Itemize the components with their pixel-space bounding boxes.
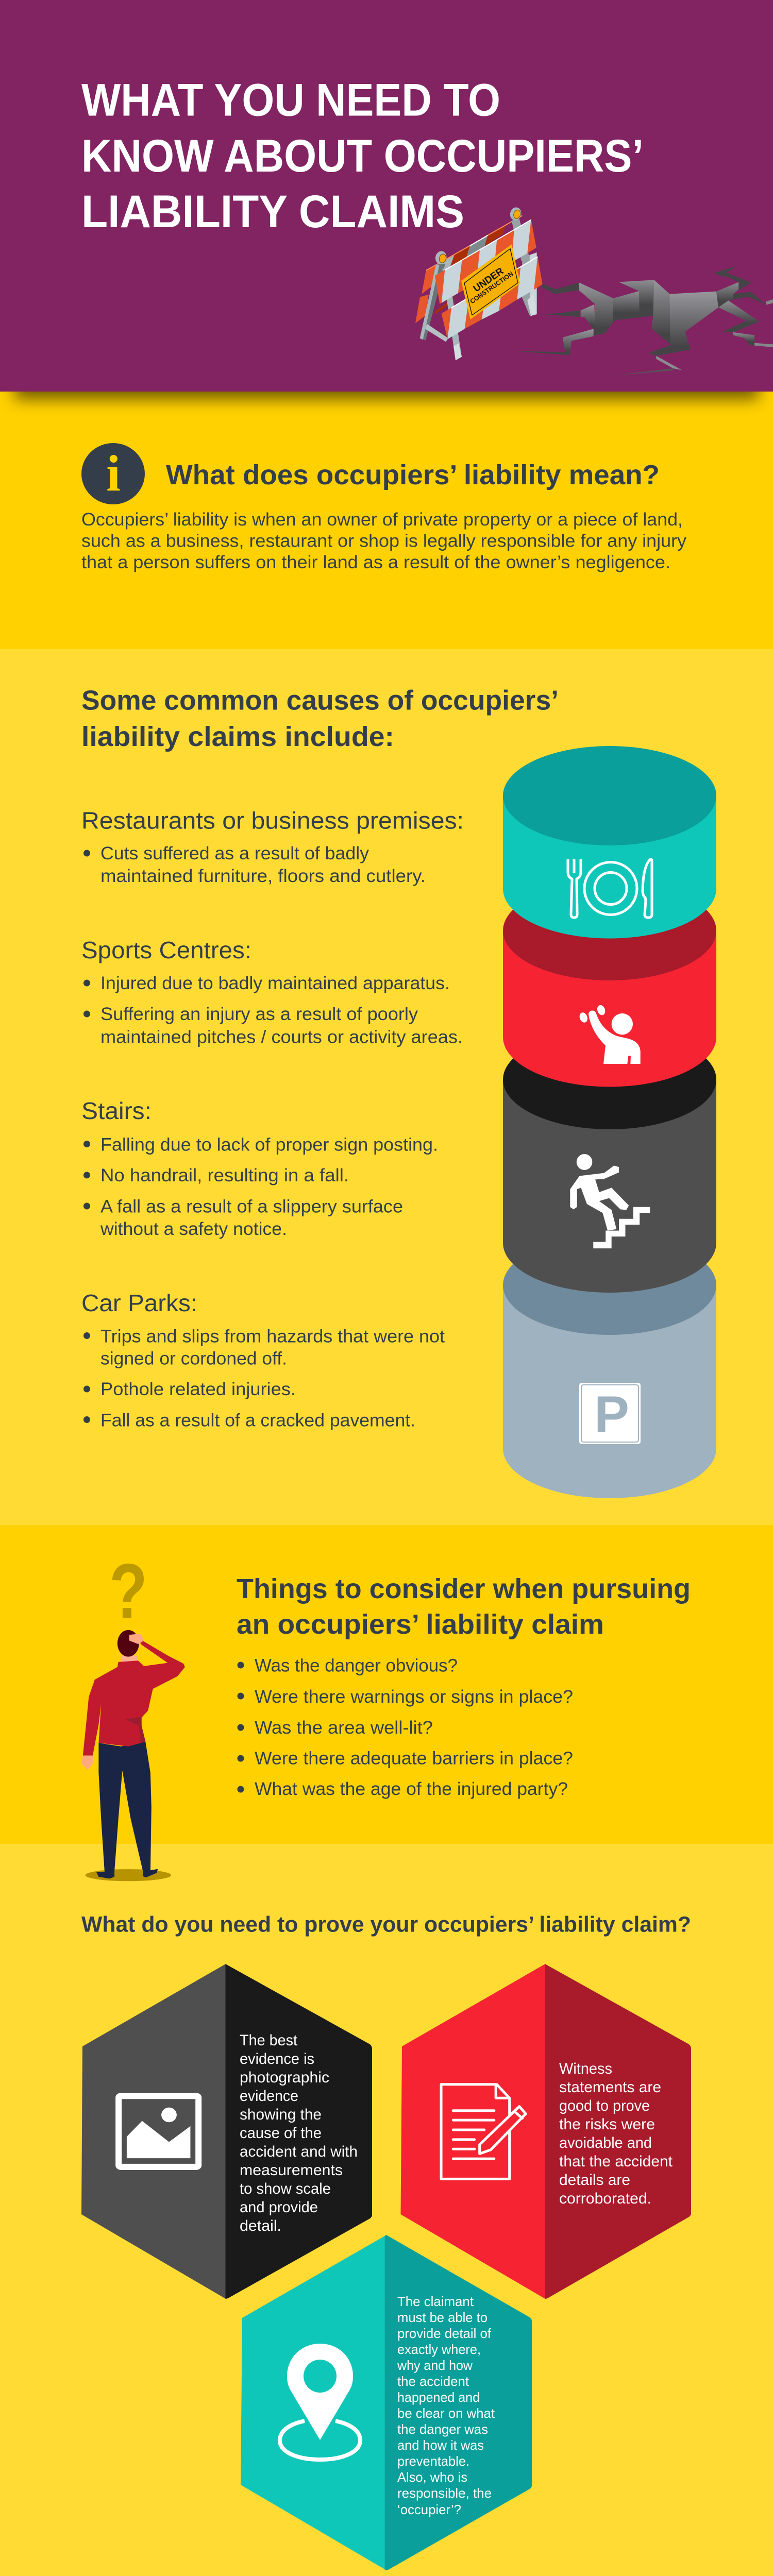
panel: what do you need to prove <box>0 1844 773 2576</box>
text: witness statements: avoidable and <box>559 2134 652 2151</box>
icon: question mark: ? <box>109 1548 147 1635</box>
text block: car parks: Pothole related injuries. <box>100 1379 296 1399</box>
text: location detail: the danger was <box>397 2421 488 2437</box>
text: location detail: happened and <box>397 2389 480 2405</box>
text: location detail: The claimant <box>397 2294 474 2309</box>
icon: document and pen <box>441 2084 526 2179</box>
text: photographic evidence: and provide <box>240 2199 318 2216</box>
text block: car parks: Car Parks: <box>81 1290 197 1316</box>
hexagon: witness statements <box>401 1964 691 2299</box>
text block: car parks: signed or cordoned off. <box>100 1349 287 1369</box>
text: witness statements: the risks were <box>559 2116 655 2133</box>
icon: person falling on stairs <box>570 1154 650 1248</box>
list: questions to consider: What was the age of the injured party? <box>255 1779 568 1799</box>
illustration: under construction barrier <box>415 206 543 360</box>
text block: stairs <box>81 1097 438 1239</box>
text block: stairs: A fall as a result of a slippery surface <box>100 1197 403 1217</box>
text block: stairs: No handrail, resulting in a fall. <box>100 1165 349 1185</box>
text block: sports centres: Suffering an injury as a result of poorly <box>100 1004 418 1024</box>
title: WHAT YOU NEED TO <box>81 74 500 126</box>
heading: what does occupiers' liability mean: What does occupiers’ liability mean? <box>166 460 660 490</box>
text: location detail: responsible, the <box>397 2485 492 2501</box>
cylinder: car park <box>503 1235 716 1498</box>
icon: image <box>119 2096 198 2167</box>
icon: plate and cutlery <box>568 859 652 918</box>
sign: under construction: CONSTRUCTION <box>469 270 515 305</box>
text block: stairs: Stairs: <box>81 1097 152 1124</box>
cylinder: restaurant <box>503 746 716 938</box>
icon: parking sign <box>579 1383 641 1444</box>
text block: car parks <box>81 1290 445 1431</box>
hexagon: photographic evidence <box>81 1964 372 2299</box>
panel: what does occupiers' liability mean <box>0 392 773 649</box>
text: witness statements: statements are <box>559 2079 661 2096</box>
text: photographic evidence: to show scale <box>240 2180 331 2197</box>
text block: definition <box>81 510 687 572</box>
illustration: cracked ground <box>517 266 773 375</box>
text block: restaurants: Cuts suffered as a result of badly <box>100 843 369 863</box>
list: questions to consider: Were there warnings or signs in place? <box>255 1687 573 1707</box>
text: location detail: preventable. <box>397 2453 469 2469</box>
sign: under construction <box>461 244 520 319</box>
text block: definition: such as a business, restaurant or shop is legally responsible for any injury <box>81 531 687 551</box>
hexagon: location detail <box>241 2235 532 2570</box>
text: witness statements: good to prove <box>559 2097 650 2114</box>
icon: information: i <box>106 445 121 502</box>
heading: what do you need to prove: What do you need to prove your occupiers’ liability claim? <box>81 1912 691 1937</box>
text: photographic evidence <box>240 2032 358 2234</box>
list: questions to consider: Was the danger obvious? <box>255 1656 458 1676</box>
title <box>81 74 644 237</box>
text block: restaurants: maintained furniture, floors and cutlery. <box>100 866 426 886</box>
text block: sports centres: maintained pitches / courts or activity areas. <box>100 1027 463 1047</box>
heading: things to consider: an occupiers’ liability claim <box>237 1609 604 1640</box>
panel: hero header <box>0 0 773 399</box>
text: witness statements: that the accident <box>559 2153 673 2170</box>
text: photographic evidence: measurements <box>240 2162 343 2179</box>
text: witness statements: details are <box>559 2172 630 2189</box>
text: location detail: and how it was <box>397 2437 484 2453</box>
text block: definition: that a person suffers on their land as a result of the owner’s negligence. <box>81 552 670 572</box>
text: location detail: must be able to <box>397 2310 488 2325</box>
heading: things to consider: Things to consider when pursuing <box>237 1573 691 1604</box>
heading: common causes <box>81 685 559 752</box>
sign: under construction: UNDER <box>472 266 506 294</box>
text block: sports centres <box>81 937 463 1047</box>
title: LIABILITY CLAIMS <box>81 185 464 237</box>
text block: car parks: Trips and slips from hazards that were not <box>100 1327 445 1347</box>
text: witness statements: Witness <box>559 2060 612 2077</box>
list: questions to consider: Was the area well-lit? <box>255 1718 433 1738</box>
list: questions to consider <box>237 1656 573 1799</box>
list: questions to consider: Were there adequate barriers in place? <box>255 1749 573 1768</box>
cylinder: stairs <box>503 1030 716 1293</box>
text: photographic evidence: detail. <box>240 2217 281 2234</box>
text: photographic evidence: showing the <box>240 2106 322 2123</box>
illustration: man scratching head <box>81 1630 185 1881</box>
text: witness statements: corroborated. <box>559 2190 651 2207</box>
icon: person lifting weight <box>578 1004 641 1064</box>
text block: stairs: without a safety notice. <box>100 1219 287 1239</box>
text block: car parks: Fall as a result of a cracked pavement. <box>100 1411 415 1431</box>
text: photographic evidence: cause of the <box>240 2125 322 2142</box>
heading: common causes: liability claims include: <box>81 721 394 752</box>
text block: restaurants <box>81 807 464 886</box>
text: photographic evidence: evidence <box>240 2088 298 2105</box>
text: location detail: the accident <box>397 2374 469 2389</box>
text: location detail: exactly where, <box>397 2342 481 2357</box>
text block: definition: Occupiers’ liability is when an owner of private property or a piece of land, <box>81 510 683 530</box>
text: photographic evidence: accident and with <box>240 2143 358 2160</box>
icon: location pin <box>280 2344 360 2460</box>
cylinder: sports <box>503 881 716 1087</box>
text: location detail: Also, who is <box>397 2469 467 2485</box>
text: photographic evidence: The best <box>240 2032 298 2049</box>
heading: things to consider <box>237 1573 691 1640</box>
text: location detail: be clear on what <box>397 2405 495 2421</box>
text block: sports centres: Sports Centres: <box>81 937 251 963</box>
text: witness statements <box>559 2060 673 2207</box>
text block: stairs: Falling due to lack of proper sign posting. <box>100 1135 438 1155</box>
title: KNOW ABOUT OCCUPIERS’ <box>81 130 644 181</box>
heading: common causes: Some common causes of occupiers’ <box>81 685 559 716</box>
text: photographic evidence: evidence is <box>240 2050 314 2067</box>
text: photographic evidence: photographic <box>240 2069 329 2086</box>
lamps <box>434 206 523 265</box>
text block: sports centres: Injured due to badly maintained apparatus. <box>100 973 450 993</box>
icon: parking sign: P <box>594 1386 629 1444</box>
panel: common causes <box>0 649 773 1525</box>
text: location detail <box>397 2294 495 2517</box>
text: location detail: ‘occupier’? <box>397 2502 461 2517</box>
icon: information <box>81 443 145 504</box>
text: location detail: why and how <box>397 2358 473 2373</box>
text block: restaurants: Restaurants or business premises: <box>81 807 464 834</box>
text: location detail: provide detail of <box>397 2326 492 2341</box>
panel: things to consider <box>0 1525 773 1881</box>
